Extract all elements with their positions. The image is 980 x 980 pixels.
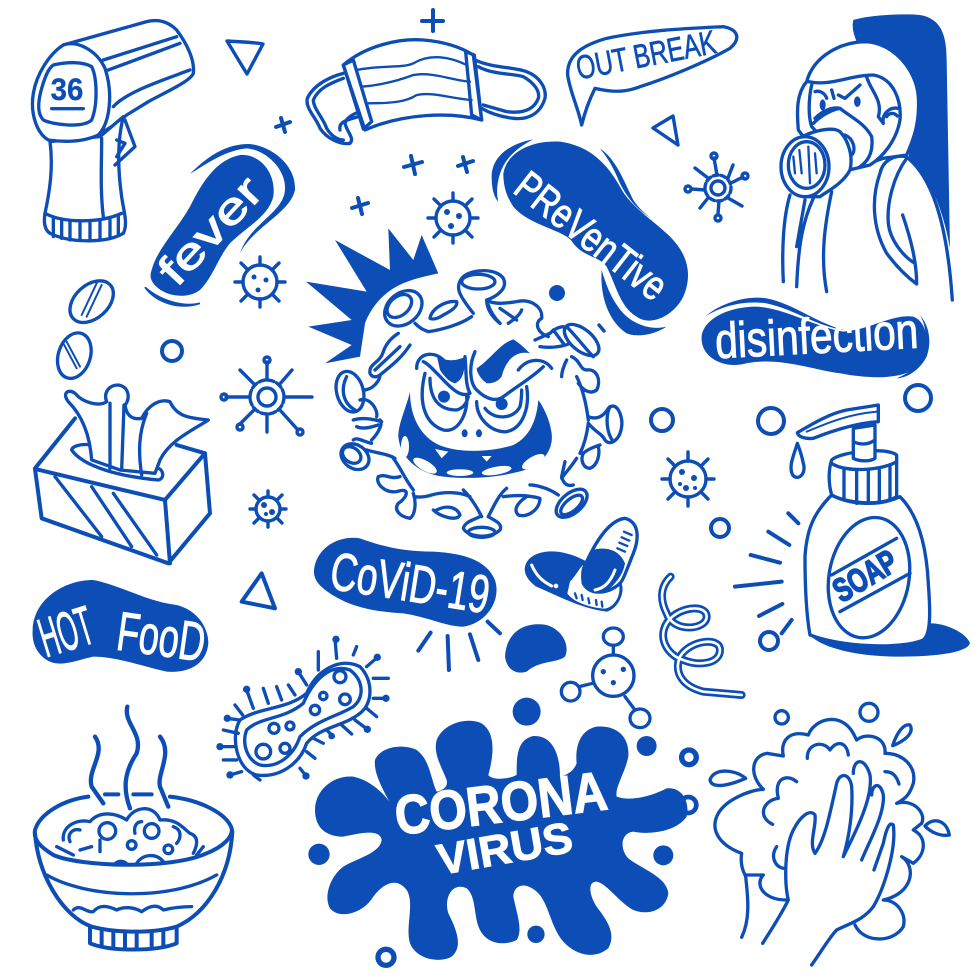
icon: small virus 4: [221, 357, 312, 435]
icon: soap bottle: SOAP: [827, 543, 904, 610]
label: hot food: HOT: [31, 594, 101, 669]
icon: soap bottle: [735, 405, 970, 657]
icon: tissue box with pills: [35, 273, 210, 563]
icon: plus marks: [276, 10, 473, 214]
blob near covid label: [505, 624, 567, 673]
icon: bacteria: [216, 636, 390, 780]
callout: out break: OUT BREAK: [573, 24, 719, 88]
icon: small virus 2: [428, 193, 478, 243]
callout: out break: [568, 24, 737, 125]
icon: dot: [549, 285, 565, 301]
icon: molecule: [561, 628, 650, 728]
label: preventive: PReVenTive: [506, 162, 677, 310]
icon: face mask: [307, 40, 545, 144]
icon: hazmat person: [781, 14, 952, 300]
label: covid-19: CoViD-19: [326, 542, 494, 625]
label: hot food: FooD: [113, 600, 209, 673]
eyes: [422, 373, 527, 432]
nostrils: [462, 429, 482, 437]
label: hot food: [31, 580, 209, 673]
icon: triangle top: [227, 41, 263, 74]
icon: triangle lower left: [242, 573, 275, 608]
icon: small viruses: [221, 153, 748, 527]
splash: corona virus: CORONA: [391, 759, 611, 847]
icon: triangle right: [653, 116, 678, 145]
icon: small virus 6: [662, 452, 714, 506]
splash: corona virus: [308, 698, 696, 965]
icon: bowl of hot food: [35, 707, 232, 950]
icon: washing hands with foam: [710, 703, 949, 965]
label: fever: fever: [149, 167, 273, 295]
icon: splash lines: [735, 513, 798, 633]
icon: pills: [52, 273, 121, 383]
icon: small virus 1: [235, 257, 285, 307]
mouth: [398, 392, 552, 478]
icon: covid burst lines: [418, 622, 500, 670]
label: fever: [145, 144, 295, 306]
label: disinfection: disinfection: [714, 303, 920, 369]
tick near virus: [599, 325, 604, 331]
icon: small virus 3: [685, 153, 748, 221]
brows: [417, 339, 552, 399]
crown spikes: [306, 228, 438, 363]
icon: bubbles: [162, 341, 931, 650]
icon: small virus 5: [250, 491, 286, 527]
icon: squiggle virus: [662, 577, 742, 695]
icon: capsule and molecule group: [505, 518, 742, 728]
spike chains: [353, 300, 600, 518]
label: covid-19: [314, 538, 497, 627]
icon: capsule: [526, 518, 637, 610]
splash: corona virus: VIRUS: [433, 814, 576, 885]
icon: infrared thermometer: 36: [51, 71, 83, 107]
icon: infrared thermometer: [32, 21, 194, 241]
main coronavirus character: [306, 228, 622, 537]
head spikes: [332, 271, 622, 537]
